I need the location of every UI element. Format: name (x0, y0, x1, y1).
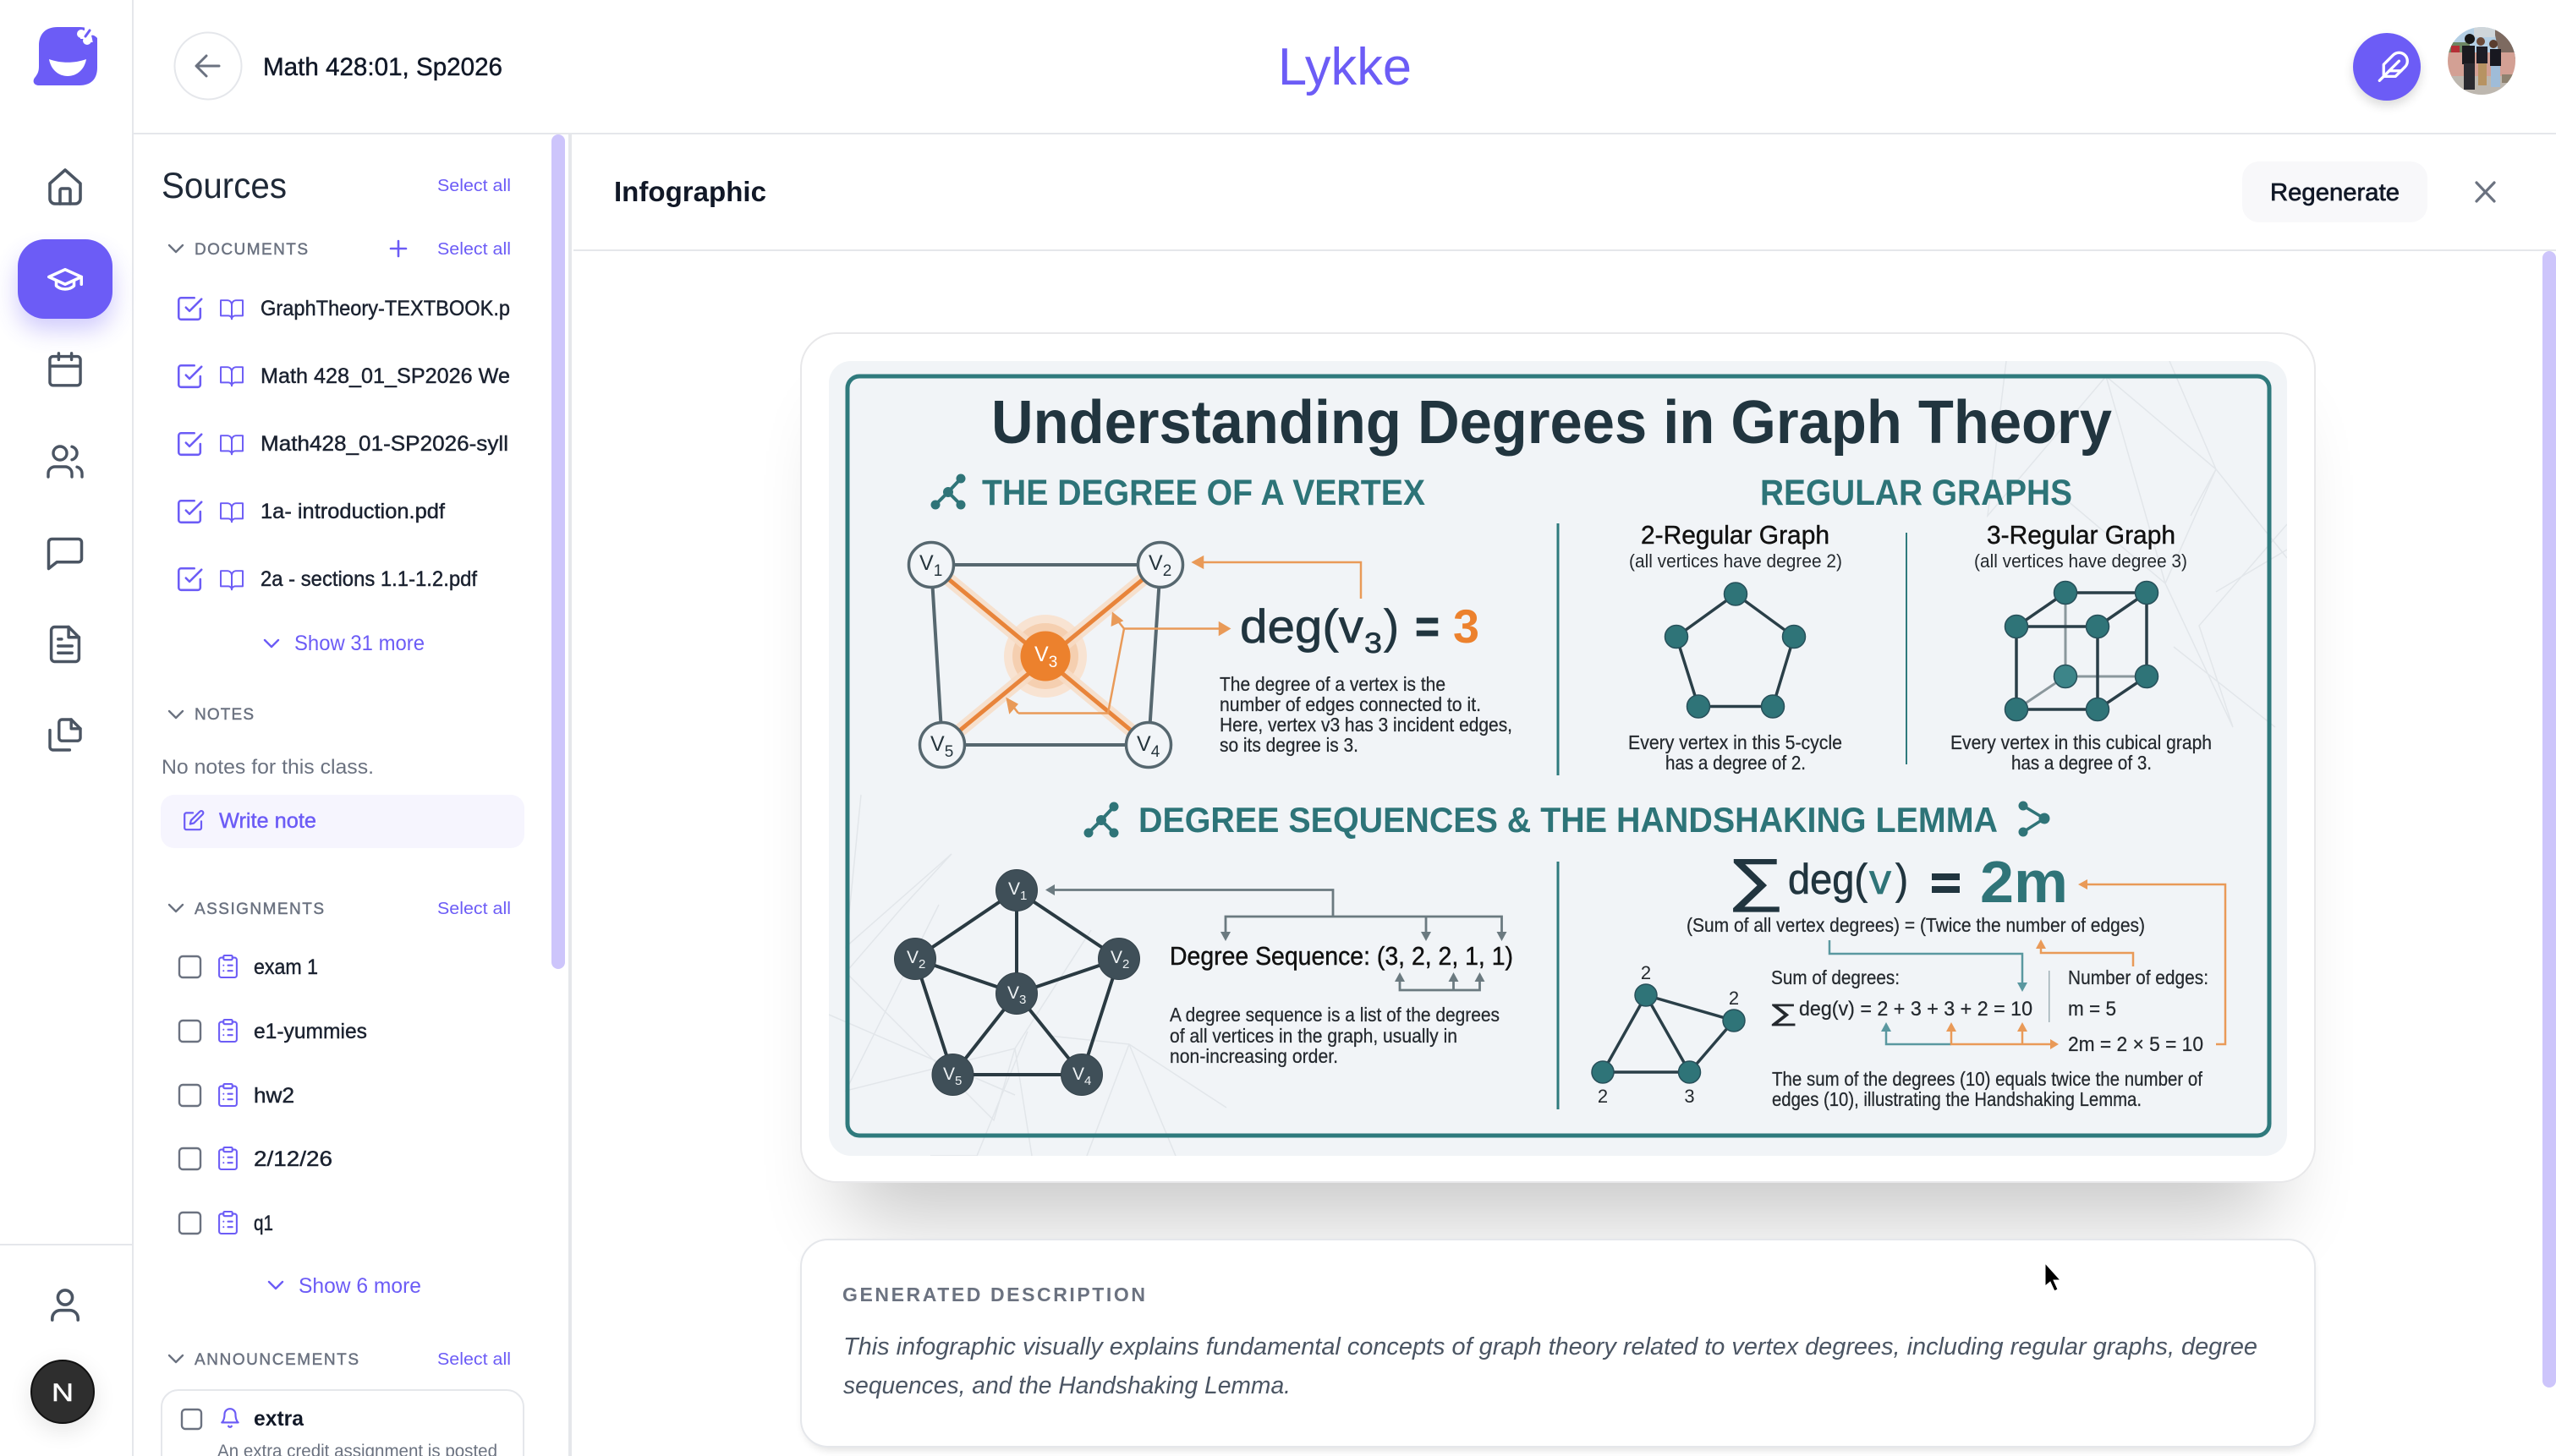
graph: vertex v3 diagram: 5 (945, 743, 953, 761)
link: show 31 more: Show 31 more (294, 632, 425, 655)
arrows: teal and orange handshaking links (1829, 879, 2225, 1049)
button: regenerate (2242, 161, 2427, 222)
3-regular graph: (all vertices have degree 3) (1974, 550, 2187, 572)
feather button (2353, 33, 2421, 106)
2-regular graph: (all vertices have degree 2) (1629, 550, 1842, 572)
graph: degree sequence diagram: V (1008, 879, 1020, 899)
button: write note (161, 795, 524, 848)
assignment rows: 2/12/26 (254, 1147, 332, 1171)
text: sum of degrees: deg(v) = 2 + 3 + 3 + 2 = 10 (1799, 998, 2032, 1021)
3-regular graph (1950, 520, 2212, 774)
graph: vertex v3 diagram: V (919, 551, 934, 575)
text: sum of degrees (1769, 966, 2032, 1026)
brand name: Lykke (1278, 38, 1412, 96)
announcement card: extra (254, 1407, 304, 1431)
graph: handshaking example: 3 (1684, 1086, 1695, 1107)
formula: handshaking lemma: 2m (1980, 849, 2068, 915)
assignment rows: exam 1 (254, 955, 318, 979)
text: degree sequence definition: non-increasing order. (1170, 1045, 1338, 1067)
formula: deg(v3) = 3: ) (1384, 599, 1399, 653)
formula: handshaking lemma: deg( (1788, 856, 1868, 903)
header bar (134, 27, 2556, 134)
section: assignments (169, 900, 511, 1298)
section: regular graphs (1556, 473, 2212, 775)
section: announcements: ANNOUNCEMENTS (195, 1351, 359, 1369)
section: documents (169, 240, 511, 655)
label: GENERATED DESCRIPTION (842, 1284, 1145, 1305)
text: sum of degrees: Sum of degrees: (1771, 966, 1900, 988)
section: announcements (162, 1350, 524, 1456)
description text: This infographic visually explains fundamental concepts of graph theory related to vertex degrees, including regular graphs, degree (843, 1333, 2257, 1360)
3-regular graph: 3-Regular Graph (1987, 520, 2175, 550)
panel: left navigation rail (0, 0, 134, 1456)
main scrollbar (2542, 251, 2556, 1388)
graph: vertex v3 diagram: 1 (934, 562, 942, 580)
2-regular graph: 2-Regular Graph (1641, 520, 1829, 550)
text: degree sequence: Degree Sequence: (3, 2, 2, 1, 1) (1170, 941, 1513, 971)
2-regular graph: has a degree of 2. (1665, 752, 1806, 774)
section: degree sequences and handshaking lemma (895, 800, 2225, 1110)
text: degree sequence definition (1170, 1004, 1500, 1067)
assignment rows: q1 (254, 1212, 273, 1235)
3-regular graph: has a degree of 3. (2011, 752, 2152, 774)
text: degree sequence definition: A degree sequence is a list of the degrees (1170, 1004, 1500, 1026)
formula: handshaking lemma: ∑ (1728, 847, 1784, 911)
text: handshaking conclusion (1772, 1068, 2203, 1110)
section: assignments: ASSIGNMENTS (195, 900, 324, 918)
description text: sequences, and the Handshaking Lemma. (843, 1372, 1291, 1399)
graph: vertex v3 diagram (908, 543, 1182, 768)
avatar: N badge: N (52, 1379, 74, 1407)
graph: degree sequence diagram: V (907, 948, 919, 967)
heading: sources: Sources (162, 166, 287, 206)
scrollbar thumb (551, 134, 565, 969)
text: empty notes message: No notes for this class. (162, 756, 374, 779)
graph: degree sequence diagram: 1 (1020, 889, 1027, 903)
graph: vertex v3 diagram: 3 (1049, 654, 1057, 671)
text: sum of degrees: ∑ (1769, 999, 1797, 1026)
icon: calendar (50, 353, 80, 386)
document rows: Math 428_01_SP2026 We (261, 364, 510, 388)
formula: deg(v3) = 3: = (1415, 599, 1440, 653)
document rows: Math428_01-SP2026-syll (261, 432, 508, 456)
text: degree definition: so its degree is 3. (1220, 734, 1358, 756)
assignment rows (179, 955, 367, 1235)
text: handshaking conclusion: edges (10), illustrating the Handshaking Lemma. (1772, 1088, 2142, 1110)
formula: handshaking lemma: ) (1895, 856, 1908, 903)
assignment rows: e1-yummies (254, 1020, 367, 1043)
graph: handshaking example: 2 (1729, 988, 1739, 1009)
icon: mouse cursor (2045, 1263, 2060, 1291)
back button (174, 32, 242, 100)
text: handshaking conclusion: The sum of the degrees (10) equals twice the number of (1772, 1068, 2203, 1090)
icon: home (50, 170, 80, 204)
section: notes: NOTES (195, 706, 254, 724)
icon: app logo (34, 26, 98, 85)
text: number of edges: Number of edges: (2068, 966, 2208, 988)
document rows: GraphTheory-TEXTBOOK.p (261, 297, 510, 320)
formula: deg(v3) = 3: deg(v (1240, 599, 1363, 653)
section: assignments: Select all (437, 900, 511, 918)
avatar photo (2448, 27, 2515, 95)
avatar: N badge (30, 1360, 95, 1431)
assignment rows: hw2 (254, 1084, 294, 1108)
panel: infographic card (801, 333, 2315, 1218)
graph: degree sequence diagram: V (943, 1065, 955, 1084)
heading: REGULAR GRAPHS (1760, 473, 2072, 513)
icon: people (48, 446, 82, 477)
heading: DEGREE SEQUENCES & THE HANDSHAKING LEMMA (1138, 800, 1998, 840)
graph: vertex v3 diagram: V (1034, 643, 1049, 666)
document rows (178, 297, 510, 591)
icon: chat (49, 539, 81, 569)
description text (843, 1333, 2257, 1399)
link: show 6 more: Show 6 more (299, 1274, 421, 1298)
title: Understanding Degrees in Graph Theory (991, 389, 2112, 457)
section: announcements: Select all (437, 1350, 511, 1369)
graph: handshaking example (1592, 962, 1745, 1107)
graph: degree sequence diagram: 2 (1122, 957, 1129, 972)
panel: infographic header (573, 161, 2556, 1388)
2-regular graph: Every vertex in this 5-cycle (1628, 731, 1842, 753)
text: degree definition: The degree of a vertex is the (1220, 673, 1445, 695)
heading: infographic: Infographic (614, 176, 766, 207)
formula: deg(v3) = 3: 3 (1453, 599, 1479, 653)
icon: profile (52, 1290, 78, 1320)
formula: handshaking lemma (1728, 847, 2068, 915)
graph: handshaking example: 2 (1641, 962, 1651, 983)
text: degree definition (1220, 673, 1512, 756)
button: write note: Write note (219, 809, 316, 833)
graph: degree sequence diagram: 2 (919, 957, 925, 972)
panel: generated description (801, 1240, 2315, 1450)
section: documents: Select all (437, 240, 511, 259)
link: select all sources: Select all (437, 177, 511, 195)
graph: degree sequence diagram: V (1072, 1065, 1084, 1084)
text: number of edges (2068, 966, 2208, 1056)
section: documents: DOCUMENTS (195, 241, 308, 259)
infographic image area (829, 361, 2287, 1156)
graph: vertex v3 diagram: 4 (1151, 743, 1160, 761)
arrows: degree sequence links (1045, 884, 1507, 990)
arrows: orange degree annotations (1007, 557, 1361, 714)
graph: degree sequence diagram: V (1111, 948, 1122, 967)
panel: sources sidebar (161, 134, 572, 1456)
graph: vertex v3 diagram: V (930, 732, 945, 756)
graph: degree sequence diagram: 3 (1019, 993, 1026, 1007)
icon: node graph left (1084, 802, 1118, 837)
icon: document (52, 627, 79, 661)
formula: handshaking lemma: v (1869, 856, 1891, 903)
section: notes (161, 706, 524, 848)
graph: vertex v3 diagram: V (1149, 551, 1163, 575)
2-regular graph (1628, 520, 1842, 774)
course title: Math 428:01, Sp2026 (263, 53, 502, 81)
icon: node graph (930, 473, 966, 509)
graph: vertex v3 diagram: V (1137, 732, 1151, 756)
text: degree sequence definition: of all vertices in the graph, usually in (1170, 1025, 1457, 1047)
section: the degree of a vertex (908, 473, 1512, 768)
graph: degree sequence diagram (895, 869, 1140, 1096)
active nav button: classes (18, 239, 112, 330)
text: degree definition: number of edges connected to it. (1220, 693, 1481, 715)
text: number of edges: m = 5 (2068, 998, 2116, 1021)
graph: handshaking example: 2 (1598, 1086, 1608, 1107)
heading: THE DEGREE OF A VERTEX (982, 473, 1425, 513)
graph: degree sequence diagram: 5 (955, 1074, 962, 1088)
teal frame (847, 376, 2269, 1136)
text: formula explanation: (Sum of all vertex degrees) = (Twice the number of edges) (1687, 914, 2145, 936)
icon: close (2476, 183, 2494, 201)
button: regenerate: Regenerate (2270, 179, 2400, 206)
graph: degree sequence diagram: V (1007, 983, 1019, 1003)
3-regular graph: Every vertex in this cubical graph (1950, 731, 2212, 753)
formula: deg(v3) = 3: 3 (1364, 627, 1382, 660)
graph: vertex v3 diagram: 2 (1163, 562, 1171, 580)
text: number of edges: 2m = 2 × 5 = 10 (2068, 1033, 2203, 1056)
formula: deg(v3) = 3 (1240, 599, 1479, 660)
document rows: 1a- introduction.pdf (261, 500, 445, 523)
announcement card (162, 1390, 524, 1456)
icon: node graph right (2018, 802, 2050, 837)
document rows: 2a - sections 1.1-1.2.pdf (261, 567, 477, 591)
icon: copy (50, 720, 80, 750)
graph: degree sequence diagram: 4 (1084, 1074, 1091, 1088)
text: degree definition: Here, vertex v3 has 3 incident edges, (1220, 714, 1512, 736)
